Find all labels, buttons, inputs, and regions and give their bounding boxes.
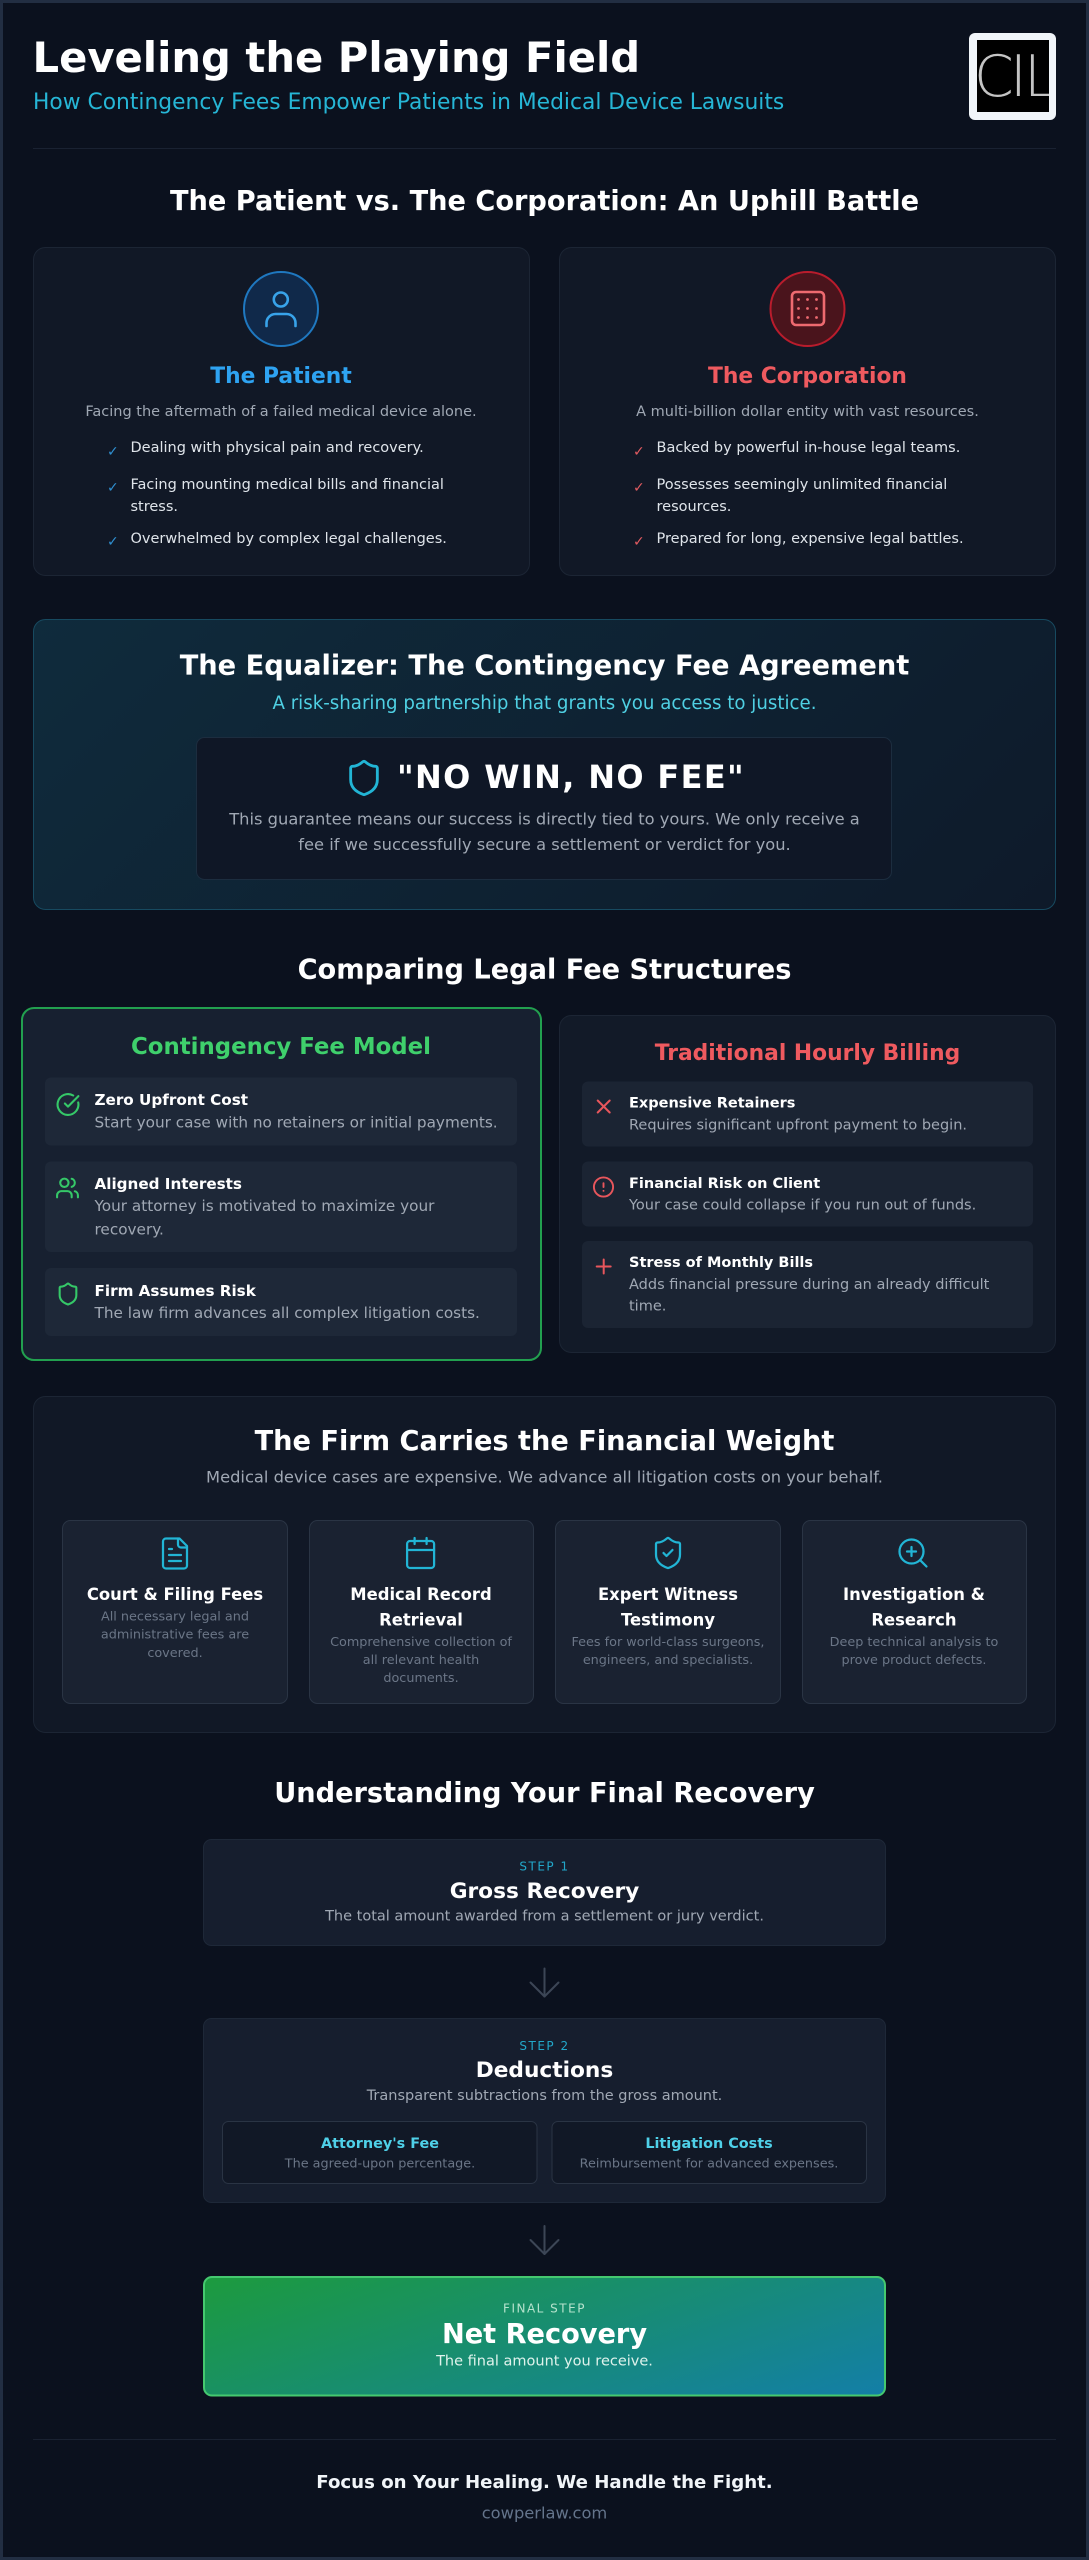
item: aligned interests — [45, 1162, 517, 1252]
guarantee text: fee if we successfully secure a settlement or verdict for you. — [298, 835, 791, 854]
card: medical records: Comprehensive collection of — [330, 1635, 512, 1650]
final step: net recovery: The final amount you receive. — [435, 2354, 653, 2370]
panel: financial weight — [34, 1396, 1056, 1732]
subtitle: How Contingency Fees Empower Patients in Medical Device Lawsuits — [33, 90, 784, 115]
final step: net recovery: FINAL STEP — [503, 2302, 586, 2316]
corporation title: The Corporation — [708, 364, 907, 389]
patient list — [107, 440, 447, 550]
corporation list: ✓ — [633, 534, 645, 550]
guarantee text: This guarantee means our success is directly tied to yours. We only receive a — [228, 810, 860, 828]
equalizer subtitle: A risk-sharing partnership that grants you access to justice. — [272, 693, 817, 714]
item: financial risk: Your case could collapse if you run out of funds. — [628, 1198, 976, 1214]
patient list: Overwhelmed by complex legal challenges. — [130, 531, 447, 547]
guarantee box — [196, 738, 892, 880]
litigation costs: Litigation Costs — [645, 2136, 773, 2152]
card: medical records: Retrieval — [379, 1611, 463, 1630]
icon: shield — [349, 760, 379, 796]
item: firm assumes risk — [45, 1268, 517, 1336]
card: court fees — [62, 1520, 288, 1704]
item: monthly bills — [582, 1241, 1033, 1328]
step 1: STEP 1 — [519, 1860, 570, 1874]
icon: person — [244, 272, 318, 346]
card: court fees: Court & Filing Fees — [87, 1585, 263, 1604]
patient list: ✓ — [107, 444, 119, 460]
item: financial risk — [582, 1162, 1033, 1226]
litigation costs — [552, 2122, 866, 2184]
step 2 — [204, 2018, 886, 2202]
heading: comparing: Comparing Legal Fee Structures — [298, 955, 791, 986]
card: court fees: All necessary legal and — [101, 1610, 249, 1625]
corporation list: Prepared for long, expensive legal battles. — [656, 531, 964, 547]
step 2: Transparent subtractions from the gross amount. — [366, 2088, 722, 2104]
card: medical records: all relevant health — [363, 1653, 479, 1668]
item: monthly bills: time. — [629, 1299, 666, 1315]
equalizer heading: The Equalizer: The Contingency Fee Agreement — [180, 650, 909, 682]
patient list: Facing mounting medical bills and financial — [130, 477, 444, 493]
no win no fee: "NO WIN, NO FEE" — [397, 758, 745, 796]
corporation list: Backed by powerful in-house legal teams. — [656, 440, 960, 456]
corporation list: ✓ — [633, 480, 645, 496]
card: court fees: covered. — [147, 1646, 203, 1661]
step 1: Gross Recovery — [450, 1879, 639, 1904]
attorney's fee — [222, 2122, 537, 2184]
panel: the equalizer — [34, 620, 1056, 910]
card: medical records: documents. — [383, 1671, 459, 1686]
panel: traditional hourly billing — [560, 1016, 1056, 1352]
corporation list: resources. — [656, 499, 731, 515]
final step: net recovery — [204, 2277, 885, 2396]
item: expensive retainers: Requires significant upfront payment to begin. — [629, 1118, 967, 1134]
card: expert witness: Testimony — [621, 1611, 715, 1630]
footer: cowperlaw.com — [482, 2504, 607, 2523]
contingency title: Contingency Fee Model — [131, 1034, 431, 1060]
card: expert witness: Expert Witness — [598, 1585, 738, 1604]
financial weight heading: The Firm Carries the Financial Weight — [255, 1426, 834, 1457]
step 2: Deductions — [476, 2058, 613, 2083]
item: zero upfront cost: Start your case with no retainers or initial payments. — [94, 1114, 498, 1132]
attorney's fee: The agreed-upon percentage. — [284, 2157, 475, 2172]
card: expert witness — [556, 1520, 780, 1704]
attorney's fee: Attorney's Fee — [321, 2136, 439, 2152]
item: financial risk: Financial Risk on Client — [629, 1176, 820, 1192]
card: expert witness: Fees for world-class surgeons, — [572, 1635, 764, 1650]
item: monthly bills: Adds financial pressure during an already difficult — [629, 1277, 990, 1293]
step 2: STEP 2 — [519, 2039, 570, 2053]
panel: the patient — [34, 248, 530, 576]
logo: CIL — [974, 44, 1056, 110]
card: medical records: Medical Record — [350, 1585, 492, 1604]
item: zero upfront cost — [45, 1078, 517, 1146]
patient list: stress. — [130, 499, 178, 515]
corporation description: A multi-billion dollar entity with vast resources. — [636, 404, 979, 420]
heading: final recovery: Understanding Your Final Recovery — [274, 1778, 815, 1809]
card: court fees: administrative fees are — [101, 1628, 249, 1643]
litigation costs: Reimbursement for advanced expenses. — [580, 2157, 838, 2172]
patient list: ✓ — [107, 534, 119, 550]
arrow: step 1 to step 2 — [530, 1968, 560, 1998]
patient description: Facing the aftermath of a failed medical device alone. — [85, 404, 477, 420]
heading: patient vs corporation: The Patient vs. The Corporation: An Uphill Battle — [170, 186, 919, 217]
footer: Focus on Your Healing. We Handle the Fight. — [316, 2472, 773, 2493]
item: aligned interests: Your attorney is motivated to maximize your — [94, 1197, 435, 1215]
patient title: The Patient — [210, 364, 352, 389]
item: aligned interests: Aligned Interests — [94, 1175, 242, 1193]
hourly title: Traditional Hourly Billing — [655, 1041, 960, 1066]
card: investigation: prove product defects. — [842, 1653, 986, 1668]
panel: the corporation — [560, 248, 1056, 576]
arrow: step 2 to final — [530, 2225, 560, 2255]
patient list: Dealing with physical pain and recovery. — [130, 440, 424, 456]
patient list: ✓ — [107, 480, 119, 496]
step 1: The total amount awarded from a settlement or jury verdict. — [324, 1909, 764, 1925]
item: expensive retainers: Expensive Retainers — [629, 1096, 795, 1112]
card: investigation — [802, 1520, 1026, 1704]
icon: building — [770, 272, 844, 346]
corporation list — [633, 440, 964, 550]
title: Leveling the Playing Field — [32, 33, 640, 82]
step 1 — [204, 1840, 886, 1946]
financial weight subtitle: Medical device cases are expensive. We advance all litigation costs on your behalf. — [206, 1468, 883, 1487]
card: investigation: Investigation & — [843, 1585, 985, 1604]
footer — [316, 2472, 773, 2523]
card: medical records — [310, 1520, 534, 1704]
final step: net recovery: Net Recovery — [442, 2319, 647, 2350]
card: investigation: Research — [871, 1611, 957, 1630]
panel: contingency fee model — [22, 1008, 541, 1360]
item: firm assumes risk: Firm Assumes Risk — [94, 1282, 257, 1300]
item: expensive retainers — [582, 1082, 1033, 1146]
corporation list: ✓ — [633, 444, 645, 460]
corporation list: Possesses seemingly unlimited financial — [656, 477, 947, 493]
item: aligned interests: recovery. — [94, 1221, 164, 1239]
item: zero upfront cost: Zero Upfront Cost — [94, 1091, 248, 1109]
card: investigation: Deep technical analysis to — [830, 1635, 999, 1650]
card: expert witness: engineers, and specialists. — [583, 1653, 753, 1668]
item: firm assumes risk: The law firm advances all complex litigation costs. — [94, 1304, 480, 1322]
item: monthly bills: Stress of Monthly Bills — [629, 1255, 813, 1271]
header — [32, 33, 1056, 120]
